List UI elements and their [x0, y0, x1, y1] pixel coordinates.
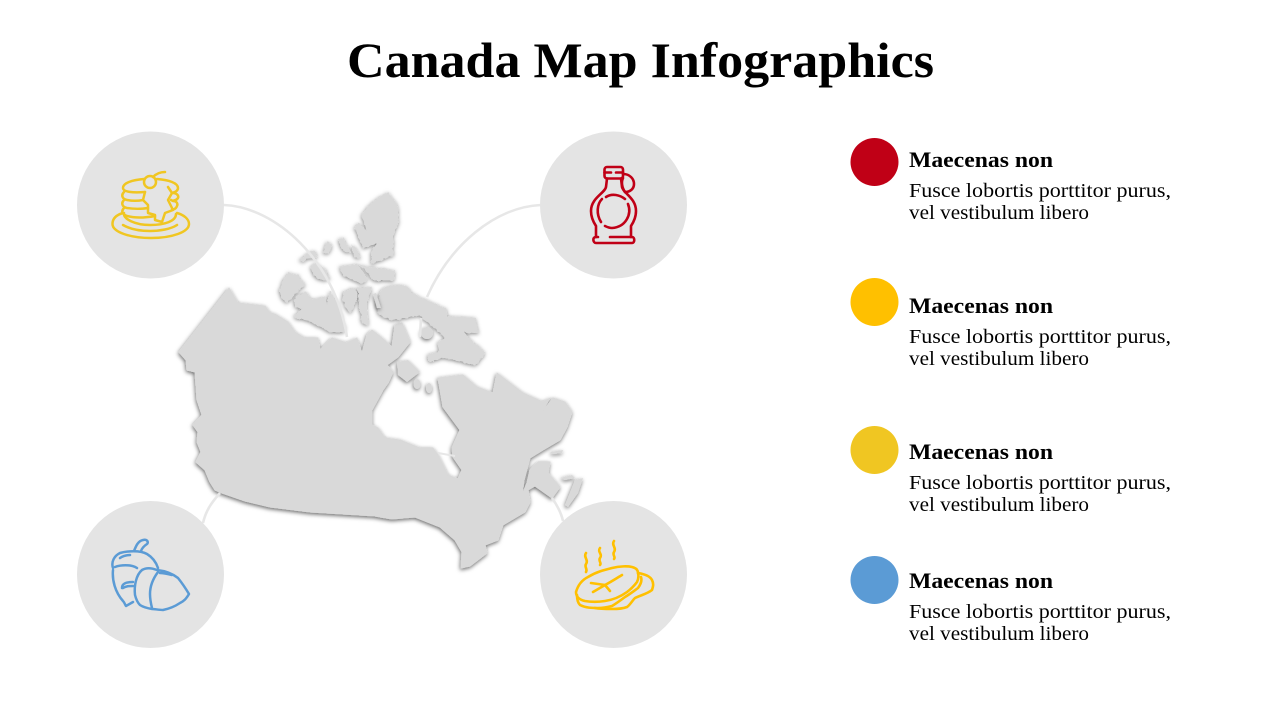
legend text 2: vel vestibulum libero [909, 348, 1089, 370]
Ellesmere Island [355, 193, 398, 263]
panel: syrup bottle [540, 132, 687, 278]
panel: steak [540, 501, 687, 648]
legend text 1: Fusce lobortis porttitor purus, [909, 180, 1171, 202]
map of Canada [179, 193, 583, 568]
Prince Charles Island [421, 327, 433, 339]
connector: top right [427, 205, 541, 297]
icon: acorns [112, 540, 189, 610]
arctic islands [280, 193, 485, 365]
panel: acorns [77, 501, 224, 648]
Prince of Wales Island [343, 288, 357, 313]
connector: bottom left [203, 493, 220, 523]
circle background [540, 132, 687, 278]
Melville Island [300, 252, 317, 262]
Newfoundland [565, 478, 583, 507]
legend text 4: Maecenas non [909, 568, 1053, 593]
legend text 4: vel vestibulum libero [909, 623, 1089, 645]
Belcher islands [414, 379, 420, 389]
Southampton Island [397, 360, 420, 382]
legend dot: yellow [850, 426, 898, 474]
connector: James Bay [438, 453, 455, 456]
connector: top right lower segment [420, 318, 421, 337]
legend text 1: vel vestibulum libero [909, 202, 1089, 224]
legend dot: amber [850, 278, 898, 326]
Victoria Island [295, 292, 345, 332]
icon: steak [576, 541, 653, 609]
legend text 2 [909, 293, 1171, 370]
small islands and Atlantic islands [373, 293, 583, 507]
legend text 3: vel vestibulum libero [909, 494, 1089, 516]
circle background [77, 132, 224, 278]
legend text 4 [909, 568, 1171, 645]
circle background [540, 501, 687, 648]
Banks Island [280, 273, 305, 303]
mainland [179, 288, 572, 568]
legend item 4 [850, 556, 1171, 645]
Devon Island [360, 265, 395, 280]
connector: bottom right [552, 498, 563, 521]
connector lines [203, 205, 563, 523]
legend dot: red [850, 138, 898, 186]
Baffin Island [377, 285, 485, 365]
legend text 1: Maecenas non [909, 147, 1053, 172]
panel: pancakes [77, 132, 224, 278]
legend text 2: Fusce lobortis porttitor purus, [909, 326, 1171, 348]
legend text 3: Fusce lobortis porttitor purus, [909, 472, 1171, 494]
circle background [77, 501, 224, 648]
legend text 4: Fusce lobortis porttitor purus, [909, 601, 1171, 623]
small northern islands [323, 242, 332, 253]
legend text 3: Maecenas non [909, 439, 1053, 464]
Somerset Island [358, 287, 371, 325]
title: Canada Map Infographics [347, 32, 934, 88]
legend item 1 [850, 138, 1171, 224]
icon: syrup bottle [591, 167, 636, 243]
connector: top left [224, 205, 347, 337]
legend text 1 [909, 147, 1171, 224]
legend text 2: Maecenas non [909, 293, 1053, 318]
icon: pancakes [112, 172, 189, 238]
legend item 3 [850, 426, 1171, 516]
legend item 2 [850, 278, 1171, 370]
Bylot strip [373, 293, 381, 308]
legend dot: blue [850, 556, 898, 604]
legend text 3 [909, 439, 1171, 516]
